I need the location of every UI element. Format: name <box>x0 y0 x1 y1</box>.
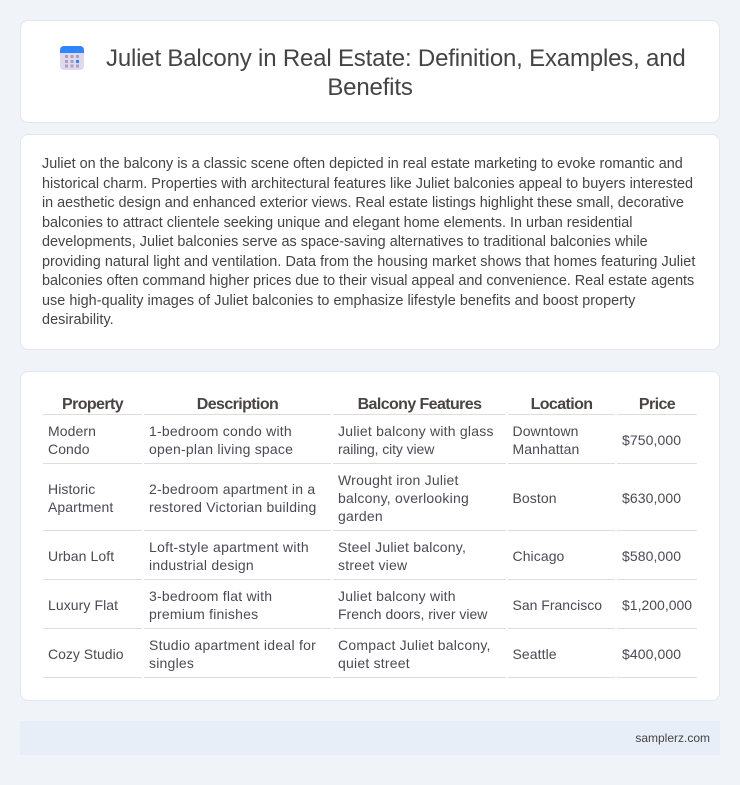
row: Modern Condo: $750,000 <box>622 432 681 448</box>
table header: Property <box>62 396 123 413</box>
panel: table <box>20 371 720 701</box>
row: Urban Loft: street view <box>338 557 407 573</box>
row: Urban Loft: industrial design <box>149 557 254 573</box>
intro text: balconies often command higher prices due to their visual appeal and convenience. Real estate agents <box>42 273 694 289</box>
intro text: providing natural light and ventilation. Data from the housing market shows that homes featuring Juliet <box>42 254 695 270</box>
row: Cozy Studio: Compact Juliet balcony, <box>338 637 491 653</box>
intro text: Juliet on the balcony is a classic scene often depicted in real estate marketing to evoke romantic and <box>42 156 683 172</box>
intro text: developments, Juliet balconies serve as space-saving alternatives to traditional balconies while <box>42 234 648 250</box>
row: Cozy Studio <box>48 637 681 671</box>
row: Modern Condo: Juliet balcony with glass <box>338 423 494 439</box>
intro text: use high-quality images of Juliet balconies to emphasize lifestyle benefits and boost property <box>42 292 635 308</box>
row: Cozy Studio: Seattle <box>512 646 557 662</box>
row: Cozy Studio: Studio apartment ideal for <box>149 637 316 653</box>
row: Modern Condo: Manhattan <box>512 441 579 457</box>
row: Modern Condo: Condo <box>48 441 90 457</box>
row: Historic Apartment: garden <box>338 508 383 524</box>
row: Cozy Studio: singles <box>149 655 194 671</box>
row: Luxury Flat: premium finishes <box>149 606 258 622</box>
table header: Description <box>197 396 278 413</box>
row: Historic Apartment: Wrought iron Juliet <box>338 472 459 488</box>
intro text: balconies to attract clientele seeking unique and elegant home elements. In urban residential <box>42 214 632 230</box>
row: Historic Apartment: Historic <box>48 481 95 497</box>
footer <box>20 721 720 755</box>
row: Luxury Flat: French doors, river view <box>338 606 487 622</box>
row: Cozy Studio: quiet street <box>338 655 410 671</box>
table header: Balcony Features <box>358 396 481 413</box>
row: Modern Condo: railing, city view <box>338 441 434 457</box>
panel: intro <box>20 134 720 350</box>
row: Luxury Flat: Luxury Flat <box>48 597 118 613</box>
intro text: historical charm. Properties with architectural features like Juliet balconies appeal to buyers interested <box>42 176 693 192</box>
row: Cozy Studio: $400,000 <box>622 646 681 662</box>
table <box>43 396 697 678</box>
title: Juliet Balcony in Real Estate: Definition, Examples, and <box>106 45 686 72</box>
row: Urban Loft: Steel Juliet balcony, <box>338 539 466 555</box>
title <box>106 45 686 101</box>
header card <box>20 20 720 123</box>
table header: Price <box>639 396 675 413</box>
row: Urban Loft: $580,000 <box>622 548 681 564</box>
intro text: in aesthetic design and enhanced exterior views. Real estate listings highlight these small, decorative <box>42 195 684 211</box>
title: Benefits <box>327 74 413 101</box>
row: Cozy Studio: Cozy Studio <box>48 646 123 662</box>
row: Urban Loft: Loft-style apartment with <box>149 539 309 555</box>
row: Modern Condo: Modern <box>48 423 96 439</box>
row: Modern Condo: open-plan living space <box>149 441 293 457</box>
row: Urban Loft: Urban Loft <box>48 548 114 564</box>
row: Historic Apartment: balcony, overlooking <box>338 490 469 506</box>
row: Historic Apartment: 2-bedroom apartment in a <box>149 481 315 497</box>
row: Luxury Flat: Juliet balcony with <box>338 588 456 604</box>
row: Luxury Flat: 3-bedroom flat with <box>149 588 272 604</box>
row: Luxury Flat <box>48 588 692 622</box>
row: Urban Loft <box>48 539 681 573</box>
row: Modern Condo: 1-bedroom condo with <box>149 423 292 439</box>
row: Historic Apartment: Apartment <box>48 499 113 515</box>
intro text: desirability. <box>42 312 114 328</box>
row: Historic Apartment <box>48 472 681 524</box>
row: Luxury Flat: $1,200,000 <box>622 597 692 613</box>
icon: calendar <box>60 46 84 70</box>
row: Urban Loft: Chicago <box>512 548 564 564</box>
intro text <box>42 156 696 328</box>
row: Historic Apartment: Boston <box>512 490 557 506</box>
row: Historic Apartment: restored Victorian building <box>149 499 317 515</box>
table header <box>62 396 676 413</box>
row: Luxury Flat: San Francisco <box>512 597 602 613</box>
row: Modern Condo: Downtown <box>512 423 579 439</box>
footer: samplerz.com <box>635 731 710 745</box>
row: Modern Condo <box>48 423 681 457</box>
row: Historic Apartment: $630,000 <box>622 490 681 506</box>
table header: Location <box>531 396 592 413</box>
